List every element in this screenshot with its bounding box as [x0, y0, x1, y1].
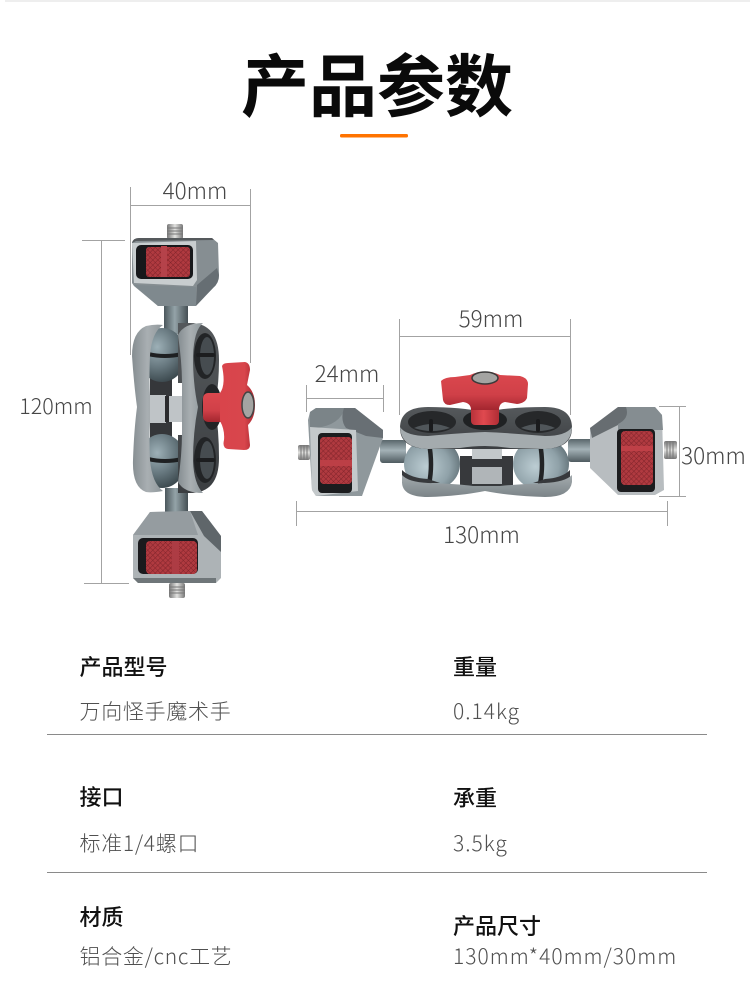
lower plate — [402, 470, 572, 497]
top ball joint — [138, 328, 186, 382]
horizontal product view — [298, 372, 677, 497]
spec: interface: 接口 — [80, 780, 124, 812]
spec: product size — [453, 909, 677, 971]
spec: material: 材质 — [80, 900, 124, 932]
rear dark plate — [178, 323, 219, 493]
dimension: 120mm — [19, 240, 129, 584]
left plate band — [132, 325, 163, 492]
bottom clamp — [133, 488, 221, 598]
right plate front band — [178, 323, 203, 493]
spec: material: 铝合金/cnc工艺 — [80, 941, 232, 971]
right clamp — [568, 407, 677, 495]
vertical product view — [132, 224, 255, 598]
top clamp — [132, 224, 219, 334]
spec: load capacity: 3.5kg — [453, 828, 508, 858]
spec: weight: 重量 — [453, 650, 497, 682]
dimension: 40mm: 40mm — [163, 174, 227, 206]
left clamp — [298, 408, 406, 496]
dimension: 30mm: 30mm — [681, 439, 746, 471]
spec: weight — [453, 650, 520, 726]
red wing knob — [441, 372, 528, 430]
spec: product size: 130mm*40mm/30mm — [453, 941, 677, 971]
spec: interface — [80, 780, 199, 858]
dimension: 59mm — [399, 302, 570, 415]
spec: load capacity: 承重 — [453, 781, 497, 813]
centre connector — [460, 445, 513, 486]
title: 产品参数 — [241, 32, 513, 131]
right ball joint — [513, 438, 569, 490]
bottom ball joint — [138, 434, 186, 488]
dimension: 130mm: 130mm — [443, 518, 520, 550]
centre connector blocks — [148, 383, 185, 435]
left ball joint — [404, 438, 460, 490]
spec: product model — [80, 650, 231, 726]
spec: material — [80, 900, 232, 971]
dimension: 40mm — [130, 174, 250, 363]
red wing knob — [202, 362, 255, 450]
dimension: 24mm — [306, 357, 384, 412]
dimension: 30mm — [659, 406, 746, 496]
spec: product size: 产品尺寸 — [453, 909, 541, 941]
row divider — [47, 734, 707, 735]
top edge strip — [5, 0, 750, 2]
spec: product model: 万向怪手魔术手 — [80, 696, 231, 726]
spec: weight: 0.14kg — [453, 696, 520, 726]
title accent underline — [340, 134, 408, 138]
dimension: 130mm — [296, 501, 668, 550]
dimension: 120mm: 120mm — [19, 390, 93, 421]
dimension: 24mm: 24mm — [315, 357, 379, 389]
dimension: 59mm: 59mm — [459, 302, 523, 334]
spec: product model: 产品型号 — [80, 650, 168, 682]
spec: interface: 标准1/4螺口 — [80, 828, 199, 858]
spec: load capacity — [453, 781, 508, 858]
centre shadow behind balls — [150, 378, 172, 438]
row divider — [47, 872, 707, 873]
upper plate — [400, 407, 572, 449]
